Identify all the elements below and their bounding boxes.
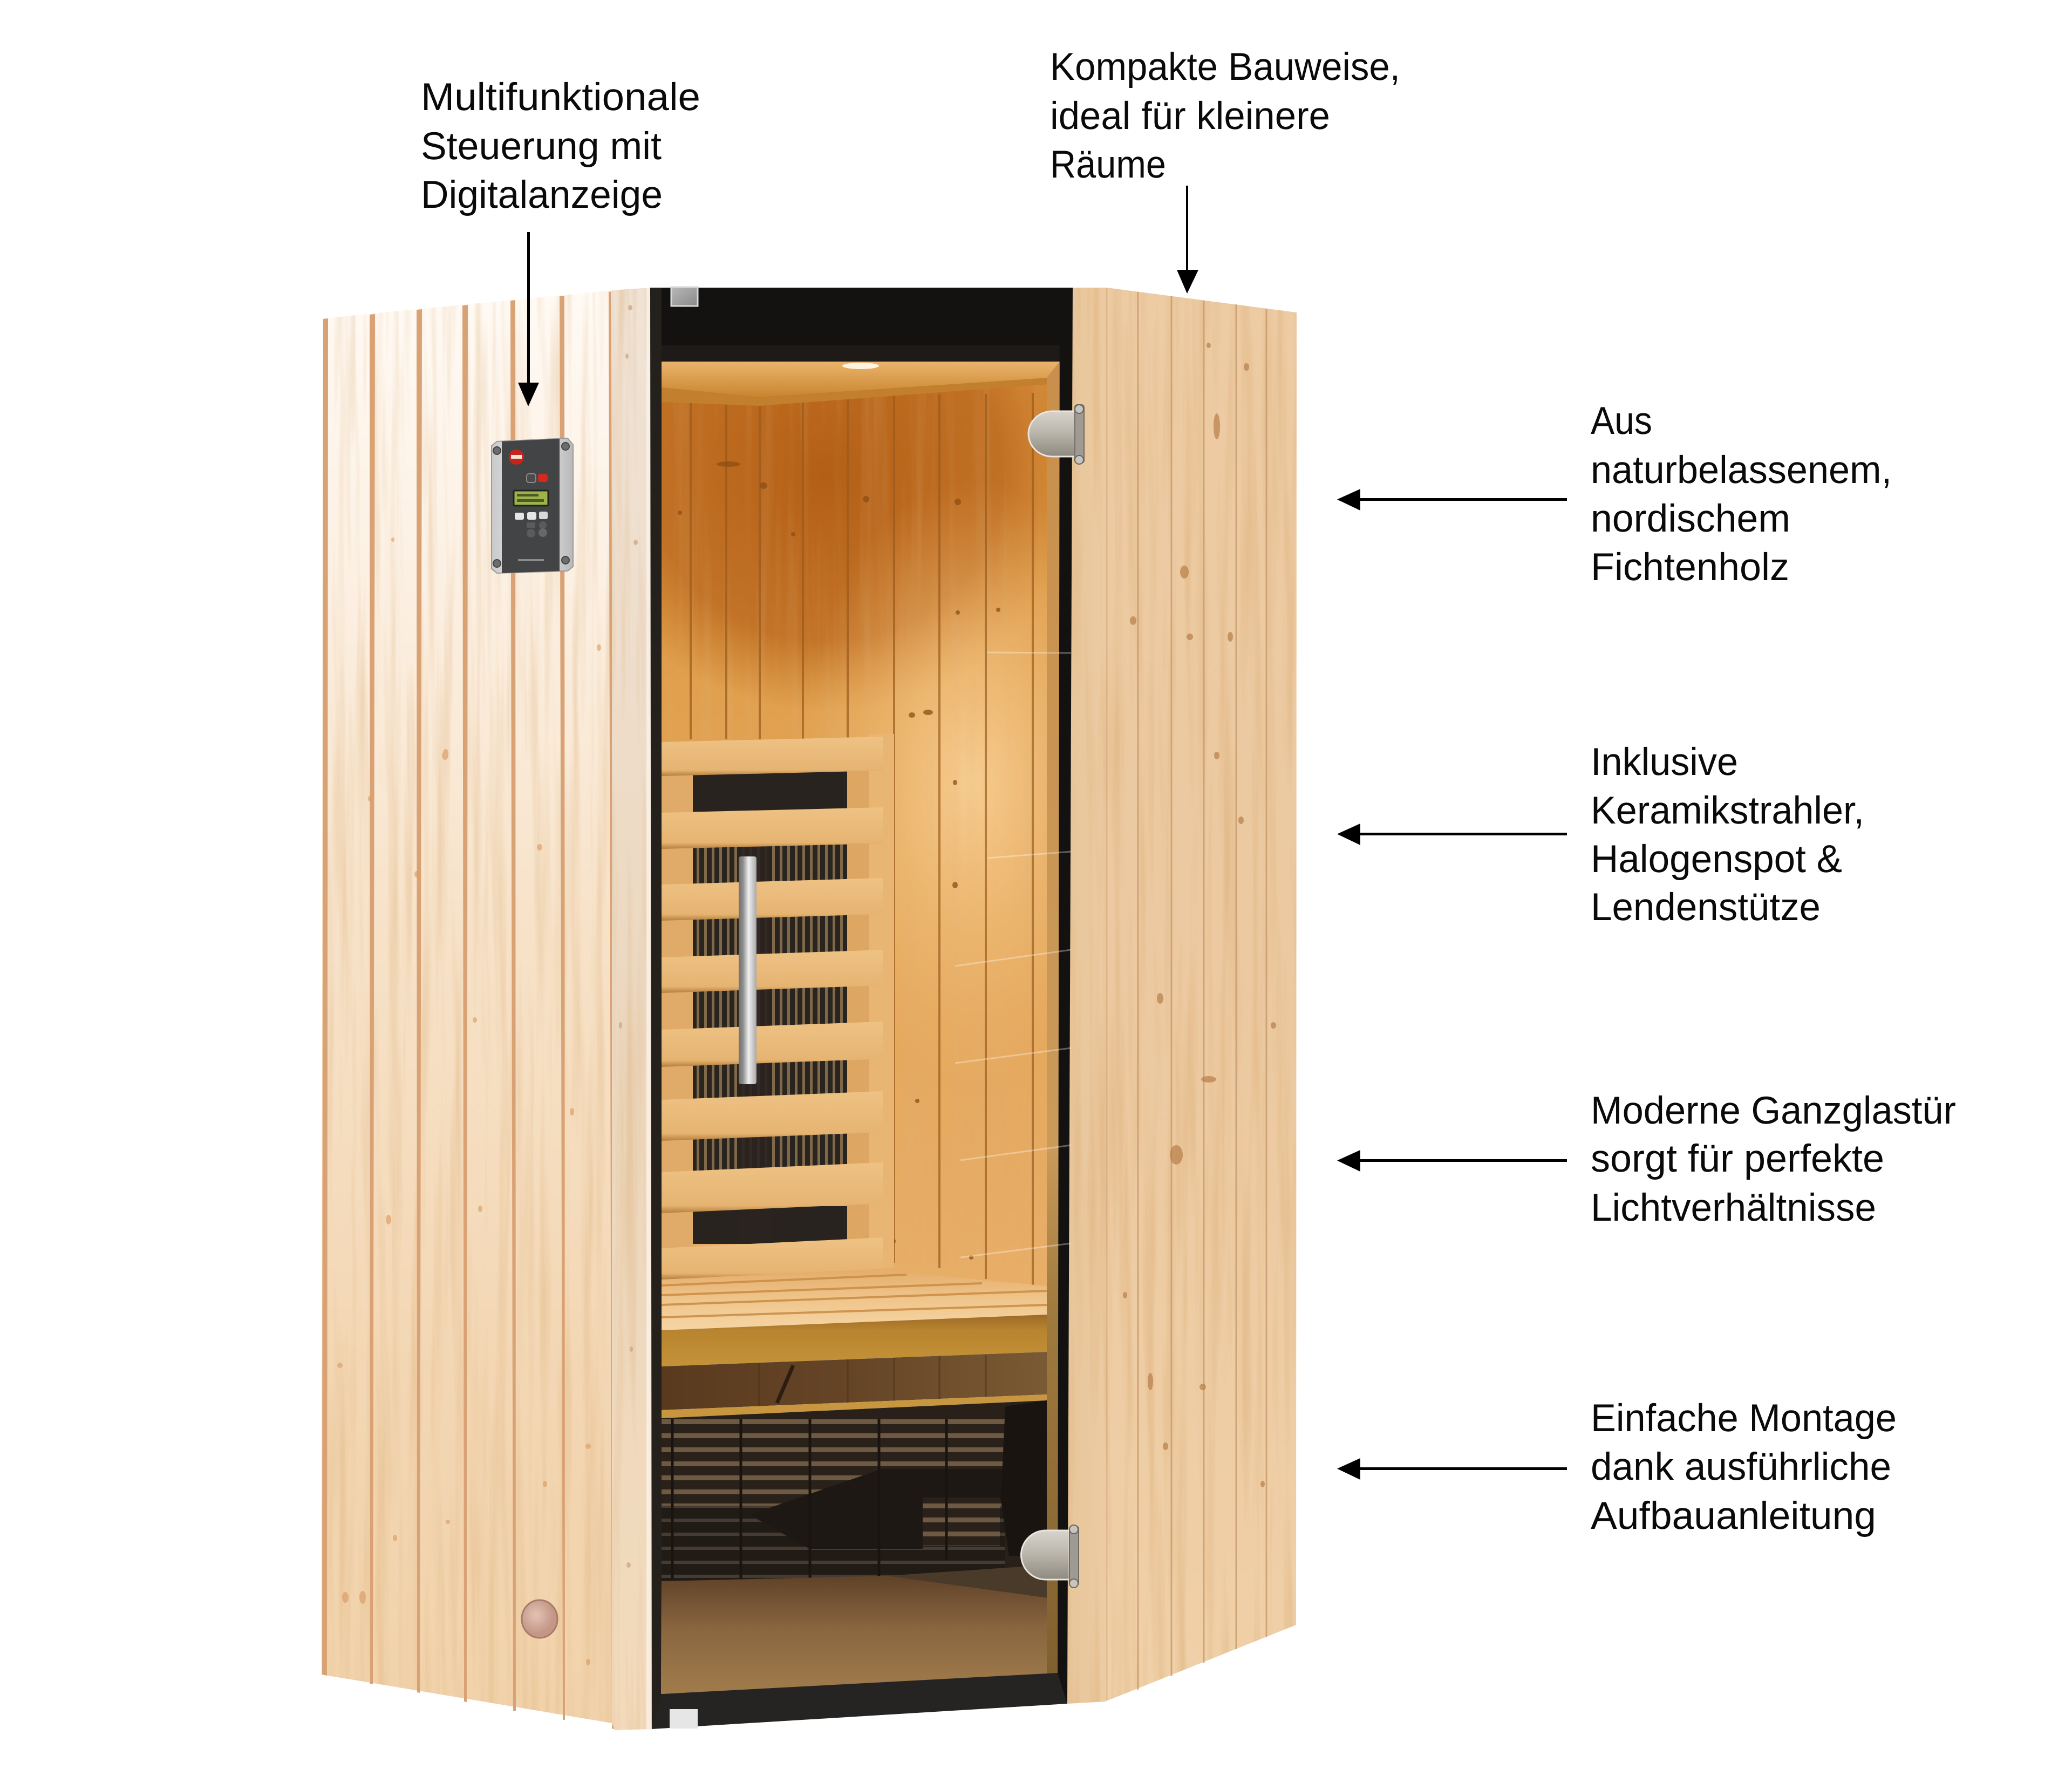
text: compact design bbox=[1050, 45, 1400, 186]
backrest horizontal slats bbox=[662, 737, 883, 1280]
door handle bbox=[739, 856, 756, 1084]
callout: control bbox=[421, 76, 700, 406]
text: wood: nordischem bbox=[1591, 497, 1790, 540]
arrow: to lower cabin bbox=[1337, 1458, 1567, 1480]
text: control: Digitalanzeige bbox=[421, 173, 663, 216]
callout: glass door bbox=[1337, 1089, 1956, 1229]
text: heater bbox=[1591, 740, 1864, 929]
text: compact design: Kompakte Bauweise, bbox=[1050, 45, 1400, 89]
text: control bbox=[421, 76, 700, 216]
glass door frame bbox=[650, 288, 1073, 1729]
callout: wood bbox=[1337, 399, 1892, 589]
text: wood: naturbelassenem, bbox=[1591, 448, 1892, 492]
callout: compact design bbox=[1050, 45, 1400, 294]
text: assembly: Aufbauanleitung bbox=[1591, 1494, 1876, 1537]
text: heater: Keramikstrahler, bbox=[1591, 789, 1864, 832]
text: control: Multifunktionale bbox=[421, 76, 700, 119]
glass clip top bbox=[671, 287, 698, 306]
lower door hinge bbox=[1021, 1525, 1079, 1588]
glass clip bottom bbox=[670, 1709, 698, 1729]
arrow: to cabin top bbox=[1177, 186, 1198, 294]
arrow: to control panel bbox=[518, 232, 539, 406]
ceiling with halogen spot bbox=[662, 362, 1060, 406]
text: heater: Halogenspot & bbox=[1591, 838, 1842, 881]
panel: corner post bbox=[610, 286, 653, 1732]
text: assembly: dank ausführliche bbox=[1591, 1445, 1891, 1488]
callout: assembly bbox=[1337, 1397, 1897, 1537]
text: heater: Lendenstütze bbox=[1591, 886, 1821, 929]
text: control: Steuerung mit bbox=[421, 125, 662, 168]
text: glass door: Lichtverhältnisse bbox=[1591, 1186, 1876, 1229]
text: wood bbox=[1591, 399, 1892, 589]
text: compact design: ideal für kleinere bbox=[1050, 94, 1330, 138]
arrow: to heaters bbox=[1337, 824, 1567, 845]
upper door hinge bbox=[1028, 405, 1084, 464]
floor bbox=[662, 1576, 1048, 1694]
sauna cabin bbox=[318, 237, 1298, 1732]
callout: heater bbox=[1337, 740, 1864, 929]
panel: left wall with tongue-and-groove planks bbox=[318, 286, 615, 1732]
backrest dark heater panels bbox=[693, 769, 847, 1244]
icon: control panel with digital display bbox=[492, 438, 573, 573]
text: glass door: sorgt für perfekte bbox=[1591, 1137, 1884, 1180]
text: heater: Inklusive bbox=[1591, 740, 1738, 784]
panel: interior back walls bbox=[662, 362, 1060, 1286]
text: glass door bbox=[1591, 1089, 1956, 1229]
heater grille reflection under bench bbox=[662, 1400, 1047, 1600]
bench seat bbox=[662, 1271, 1047, 1418]
text: wood: Aus bbox=[1591, 399, 1652, 443]
arrow: to glass door bbox=[1337, 1150, 1567, 1172]
text: glass door: Moderne Ganzglastür bbox=[1591, 1089, 1956, 1132]
icon: round cable outlet bbox=[522, 1600, 557, 1638]
backrest vertical posts bbox=[662, 734, 894, 1268]
text: wood: Fichtenholz bbox=[1591, 546, 1789, 589]
text: compact design: Räume bbox=[1050, 143, 1166, 186]
panel: right wall with vertical planks bbox=[1066, 286, 1298, 1705]
text: assembly bbox=[1591, 1397, 1897, 1537]
arrow: to wood wall bbox=[1337, 489, 1567, 511]
text: assembly: Einfache Montage bbox=[1591, 1397, 1897, 1440]
